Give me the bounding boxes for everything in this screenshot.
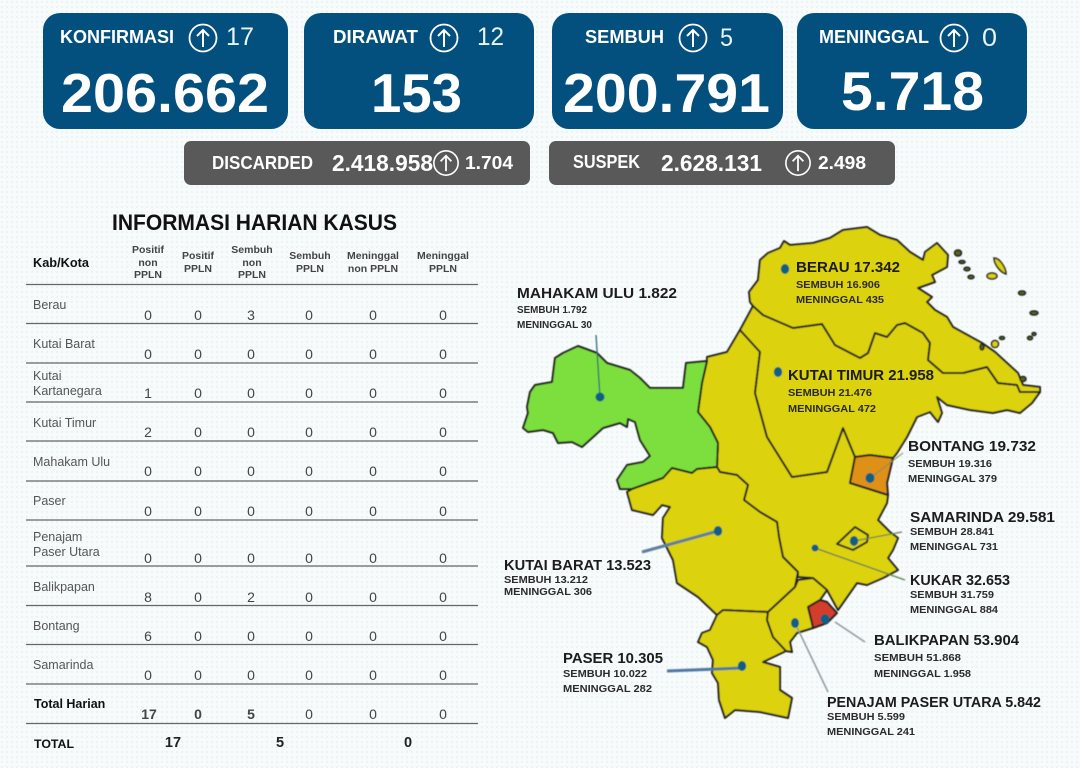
table header: PPLN — [134, 269, 162, 281]
row: samarinda: 0 — [194, 667, 202, 683]
table header: Kab/Kota — [33, 256, 90, 270]
row: samarinda — [33, 658, 447, 683]
row: kutai kartanegara: 1 — [144, 385, 152, 401]
label: paser: SEMBUH 10.022 — [563, 668, 647, 680]
row: total harian: 0 — [369, 706, 377, 722]
region: samarinda — [837, 527, 868, 550]
row: mahakam ulu: 0 — [369, 463, 377, 479]
table header: Positif — [132, 244, 165, 256]
row: paser: 0 — [194, 503, 202, 519]
row: total: 17 — [165, 735, 181, 751]
label: bontang: SEMBUH 19.316 — [908, 458, 992, 470]
table header: Sembuh — [289, 250, 331, 262]
table header: PPLN — [296, 263, 324, 275]
region: balikpapan — [808, 600, 837, 628]
label: berau — [796, 259, 900, 306]
row: mahakam ulu: 0 — [247, 463, 255, 479]
row: kutai timur: 0 — [305, 424, 313, 440]
row: kutai timur: 0 — [369, 424, 377, 440]
row: bontang: Bontang — [33, 619, 80, 633]
label: penajam paser utara: PENAJAM PASER UTARA 5.842 — [827, 694, 1041, 711]
label: samarinda: SAMARINDA 29.581 — [910, 509, 1055, 526]
row: samarinda: 0 — [247, 667, 255, 683]
row: mahakam ulu: Mahakam Ulu — [33, 455, 110, 469]
panel: dirawat — [304, 13, 534, 129]
label: kutai timur — [788, 367, 934, 415]
row: bontang: 0 — [247, 628, 255, 644]
location dots — [596, 264, 874, 671]
row: bontang: 0 — [194, 628, 202, 644]
row: mahakam ulu: 0 — [194, 463, 202, 479]
row: berau: 0 — [194, 307, 202, 323]
label: samarinda: SEMBUH 28.841 — [910, 526, 994, 538]
row: berau: 0 — [369, 307, 377, 323]
panel: sembuh: 200.791 — [563, 62, 770, 124]
region: kukar — [698, 330, 898, 610]
row: penajam paser utara: 0 — [305, 550, 313, 566]
row: berau: 0 — [305, 307, 313, 323]
label: kukar: MENINGGAL 884 — [910, 604, 998, 616]
row: total harian: 0 — [194, 706, 202, 722]
panel: meninggal: 0 — [982, 24, 997, 52]
label: samarinda — [910, 509, 1055, 553]
table header: non — [138, 257, 158, 269]
row: balikpapan — [33, 580, 447, 605]
row: balikpapan: 2 — [247, 589, 255, 605]
label: paser — [563, 650, 663, 695]
region: kutai timur — [740, 306, 1040, 477]
label: berau: BERAU 17.342 — [796, 259, 900, 276]
panel: meninggal — [797, 13, 1027, 129]
row: total: 5 — [276, 735, 284, 751]
row: balikpapan: 0 — [194, 589, 202, 605]
row: kutai barat: Kutai Barat — [33, 337, 95, 351]
row: total harian: 17 — [141, 706, 157, 722]
row: balikpapan: 0 — [439, 589, 447, 605]
panel: suspek: SUSPEK — [573, 152, 640, 172]
table header: non PPLN — [348, 263, 398, 275]
row: paser — [33, 494, 447, 519]
panel: suspek: 2.498 — [818, 153, 866, 173]
table header: PPLN — [238, 269, 266, 281]
row: kutai kartanegara: Kutai — [33, 369, 62, 383]
label: kukar — [910, 572, 1010, 616]
region: berau — [749, 227, 1040, 392]
label: mahakam ulu — [517, 285, 677, 331]
panel: suspek: 2.628.131 — [661, 150, 762, 176]
label: samarinda: MENINGGAL 731 — [910, 541, 998, 553]
row: bontang: 6 — [144, 628, 152, 644]
row: samarinda: 0 — [144, 667, 152, 683]
row: kutai barat: 0 — [305, 346, 313, 362]
table header: PPLN — [184, 263, 212, 275]
panel: sembuh: 5 — [720, 24, 733, 52]
row: paser: 0 — [369, 503, 377, 519]
row: paser: 0 — [439, 503, 447, 519]
table header — [33, 244, 469, 281]
label: penajam paser utara: SEMBUH 5.599 — [827, 711, 905, 723]
row: kutai timur — [33, 416, 447, 440]
label: berau: SEMBUH 16.906 — [796, 279, 880, 291]
row: paser: Paser — [33, 494, 66, 508]
label: mahakam ulu: MAHAKAM ULU 1.822 — [517, 285, 677, 302]
region: bontang — [850, 455, 893, 495]
panel: discarded: 2.418.958 — [332, 150, 433, 176]
row: paser: 0 — [144, 503, 152, 519]
region: paser — [698, 610, 792, 718]
row: bontang: 0 — [439, 628, 447, 644]
row: mahakam ulu — [33, 455, 447, 479]
region: kutai barat — [627, 467, 798, 615]
row: samarinda: 0 — [439, 667, 447, 683]
row: samarinda: Samarinda — [33, 658, 93, 672]
row: penajam paser utara: 0 — [247, 550, 255, 566]
row: total harian: 5 — [247, 706, 255, 722]
row: berau: Berau — [33, 298, 66, 312]
row: balikpapan: 0 — [305, 589, 313, 605]
panel: sembuh: SEMBUH — [585, 27, 664, 47]
row: paser: 0 — [247, 503, 255, 519]
label: balikpapan: SEMBUH 51.868 — [874, 652, 961, 664]
region: penajam paser utara — [767, 578, 827, 652]
label: mahakam ulu: MENINGGAL 30 — [517, 319, 592, 331]
panel: discarded: 1.704 — [465, 153, 513, 173]
label: kutai timur: KUTAI TIMUR 21.958 — [788, 367, 934, 384]
label: paser: PASER 10.305 — [563, 650, 663, 667]
row: kutai barat: 0 — [369, 346, 377, 362]
panel: sembuh — [552, 13, 783, 129]
label: kutai barat: MENINGGAL 306 — [504, 586, 592, 598]
panel: dirawat: DIRAWAT — [333, 27, 418, 47]
panel: konfirmasi: 17 — [226, 23, 254, 51]
row: paser: 0 — [305, 503, 313, 519]
map: kalimantan timur — [523, 227, 1040, 718]
label: paser: MENINGGAL 282 — [563, 683, 652, 695]
label: balikpapan: MENINGGAL 1.958 — [874, 668, 971, 680]
row: berau — [33, 298, 447, 323]
row: kutai timur: 2 — [144, 424, 152, 440]
table header: Meninggal — [347, 250, 399, 262]
label: balikpapan — [874, 632, 1020, 680]
table header: non — [242, 257, 262, 269]
row: kutai kartanegara: 0 — [247, 385, 255, 401]
row: kutai barat: 0 — [144, 346, 152, 362]
row: total harian: 0 — [439, 706, 447, 722]
label: kutai barat: SEMBUH 13.212 — [504, 574, 588, 586]
panel: konfirmasi: 206.662 — [61, 62, 269, 124]
label: bontang — [908, 438, 1036, 485]
table header: Sembuh — [231, 244, 273, 256]
label: kutai timur: MENINGGAL 472 — [788, 403, 876, 415]
row: mahakam ulu: 0 — [439, 463, 447, 479]
row: kutai kartanegara: 0 — [439, 385, 447, 401]
row: penajam paser utara: 0 — [439, 550, 447, 566]
row: mahakam ulu: 0 — [144, 463, 152, 479]
row: total harian — [34, 697, 447, 722]
row: total harian: Total Harian — [34, 697, 105, 711]
label: mahakam ulu: SEMBUH 1.792 — [517, 304, 587, 316]
row: berau: 3 — [247, 307, 255, 323]
panel: discarded — [184, 141, 530, 185]
row: kutai kartanegara: 0 — [194, 385, 202, 401]
panel: dirawat: 12 — [477, 23, 504, 51]
table: daily cases — [26, 244, 478, 751]
panel: dirawat: 153 — [371, 62, 462, 124]
row: penajam paser utara: 0 — [194, 550, 202, 566]
label: bontang: MENINGGAL 379 — [908, 473, 997, 485]
islands — [954, 250, 1038, 382]
table header: Positif — [182, 250, 215, 262]
panel: meninggal: MENINGGAL — [819, 27, 929, 47]
label: penajam paser utara: MENINGGAL 241 — [827, 726, 915, 738]
label: penajam paser utara — [827, 694, 1041, 738]
row: penajam paser utara: 0 — [369, 550, 377, 566]
panel: discarded: DISCARDED — [212, 153, 313, 173]
row: kutai kartanegara: 0 — [369, 385, 377, 401]
row: samarinda: 0 — [305, 667, 313, 683]
row: bontang: 0 — [369, 628, 377, 644]
row: kutai timur: 0 — [194, 424, 202, 440]
label: kukar: SEMBUH 31.759 — [910, 589, 994, 601]
row: berau: 0 — [144, 307, 152, 323]
row: balikpapan: Balikpapan — [33, 580, 95, 594]
label: balikpapan: BALIKPAPAN 53.904 — [874, 632, 1020, 649]
row: kutai kartanegara — [33, 369, 447, 401]
row: kutai barat: 0 — [194, 346, 202, 362]
panel: suspek — [549, 141, 895, 185]
panel: konfirmasi: KONFIRMASI — [60, 27, 174, 47]
region: mahakam ulu — [523, 346, 718, 489]
row: balikpapan: 8 — [144, 589, 152, 605]
panel: meninggal: 5.718 — [841, 60, 984, 122]
row: samarinda: 0 — [369, 667, 377, 683]
row: penajam paser utara — [33, 530, 447, 566]
row: total: TOTAL — [34, 737, 74, 751]
row: kutai kartanegara: 0 — [305, 385, 313, 401]
row: kutai timur: 0 — [247, 424, 255, 440]
row: kutai barat — [33, 337, 447, 362]
row: kutai timur: Kutai Timur — [33, 416, 96, 430]
label: bontang: BONTANG 19.732 — [908, 438, 1036, 455]
panel: konfirmasi — [43, 13, 288, 129]
row: balikpapan: 0 — [369, 589, 377, 605]
row: penajam paser utara: Penajam — [33, 530, 82, 544]
row: kutai barat: 0 — [247, 346, 255, 362]
label: kutai barat — [504, 557, 651, 598]
label: kutai barat: KUTAI BARAT 13.523 — [504, 557, 651, 574]
row: penajam paser utara: Paser Utara — [33, 545, 100, 559]
row: penajam paser utara: 0 — [144, 550, 152, 566]
table header: Meninggal — [417, 250, 469, 262]
row: total — [34, 735, 412, 751]
row: berau: 0 — [439, 307, 447, 323]
row: kutai timur: 0 — [439, 424, 447, 440]
row: total: 0 — [404, 735, 412, 751]
table header: PPLN — [429, 263, 457, 275]
row: bontang — [33, 619, 447, 644]
row: bontang: 0 — [305, 628, 313, 644]
row: kutai barat: 0 — [439, 346, 447, 362]
title: informasi harian kasus: INFORMASI HARIAN KASUS — [112, 210, 397, 235]
label: berau: MENINGGAL 435 — [796, 294, 884, 306]
callout lines — [596, 335, 905, 692]
label: kukar: KUKAR 32.653 — [910, 572, 1010, 589]
row: mahakam ulu: 0 — [305, 463, 313, 479]
label: kutai timur: SEMBUH 21.476 — [788, 387, 872, 399]
row: kutai kartanegara: Kartanegara — [33, 384, 102, 398]
row: total harian: 0 — [305, 706, 313, 722]
